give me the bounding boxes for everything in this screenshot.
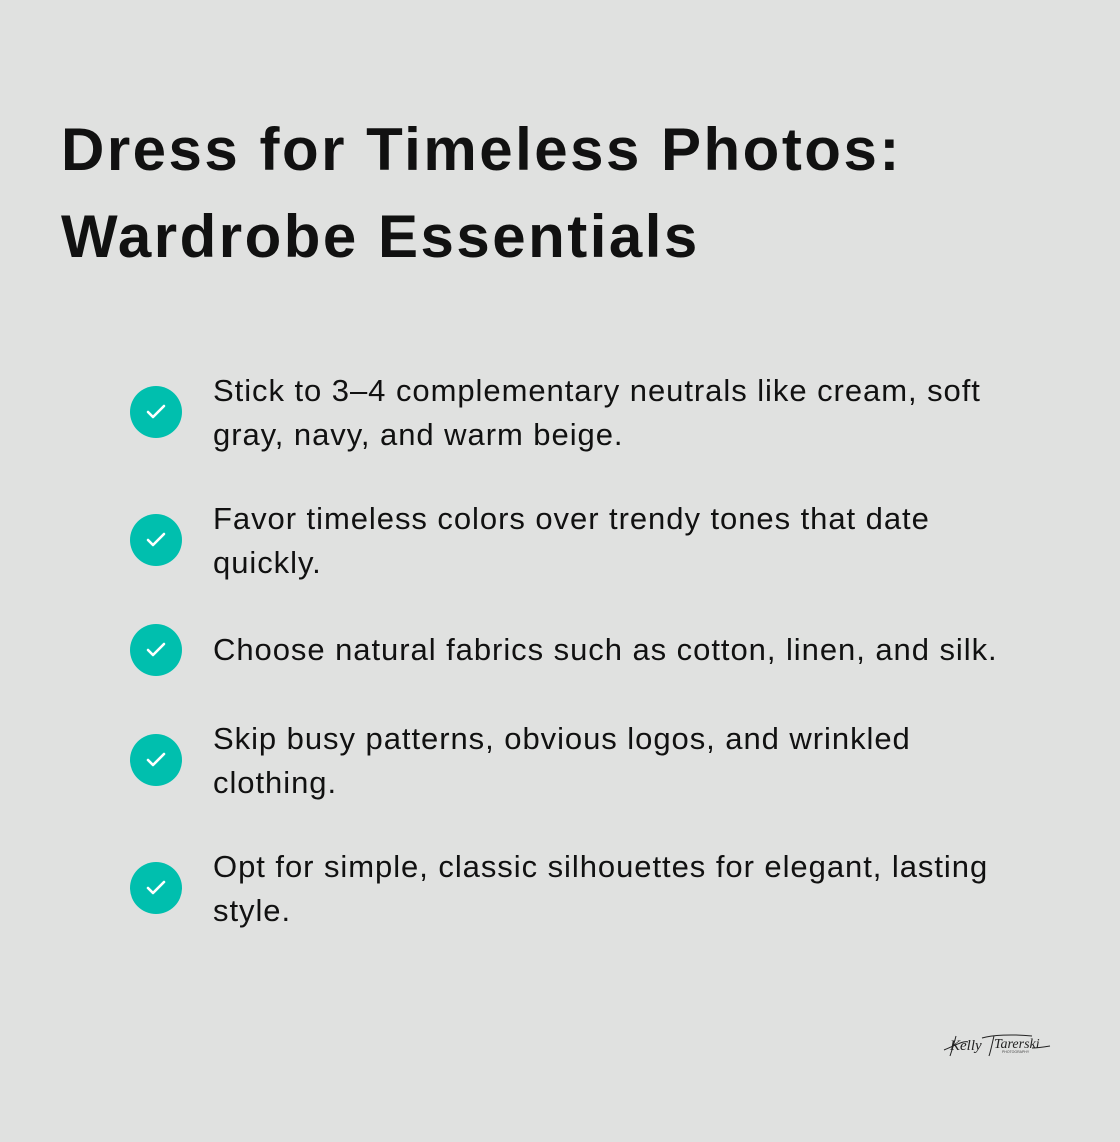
logo signature: Tarerski [994,1037,1040,1052]
text 4: Skip busy patterns, obvious logos, and wrinkled clothing. [213,721,911,800]
text 3: Choose natural fabrics such as cotton, linen, and silk. [213,632,998,667]
item 5 [130,849,988,928]
icon: check 1 [130,386,182,438]
item 4 [130,721,911,800]
title [61,116,902,270]
text 1: Stick to 3–4 complementary neutrals like cream, soft gray, navy, and warm beige. [213,373,981,452]
title: Wardrobe Essentials [61,203,700,270]
item 2 [130,501,930,580]
icon: check 2 [130,514,182,566]
text 2: Favor timeless colors over trendy tones that date quickly. [213,501,930,580]
item 1 [130,373,981,452]
logo signature [944,1034,1050,1056]
icon: check 3 [130,624,182,676]
logo signature: PHOTOGRAPHY [1002,1050,1030,1054]
title: Dress for Timeless Photos: [61,116,902,183]
text 5: Opt for simple, classic silhouettes for elegant, lasting style. [213,849,988,928]
logo signature: Kelly [949,1038,982,1054]
icon: check 4 [130,734,182,786]
item 3 [130,624,998,676]
icon: check 5 [130,862,182,914]
